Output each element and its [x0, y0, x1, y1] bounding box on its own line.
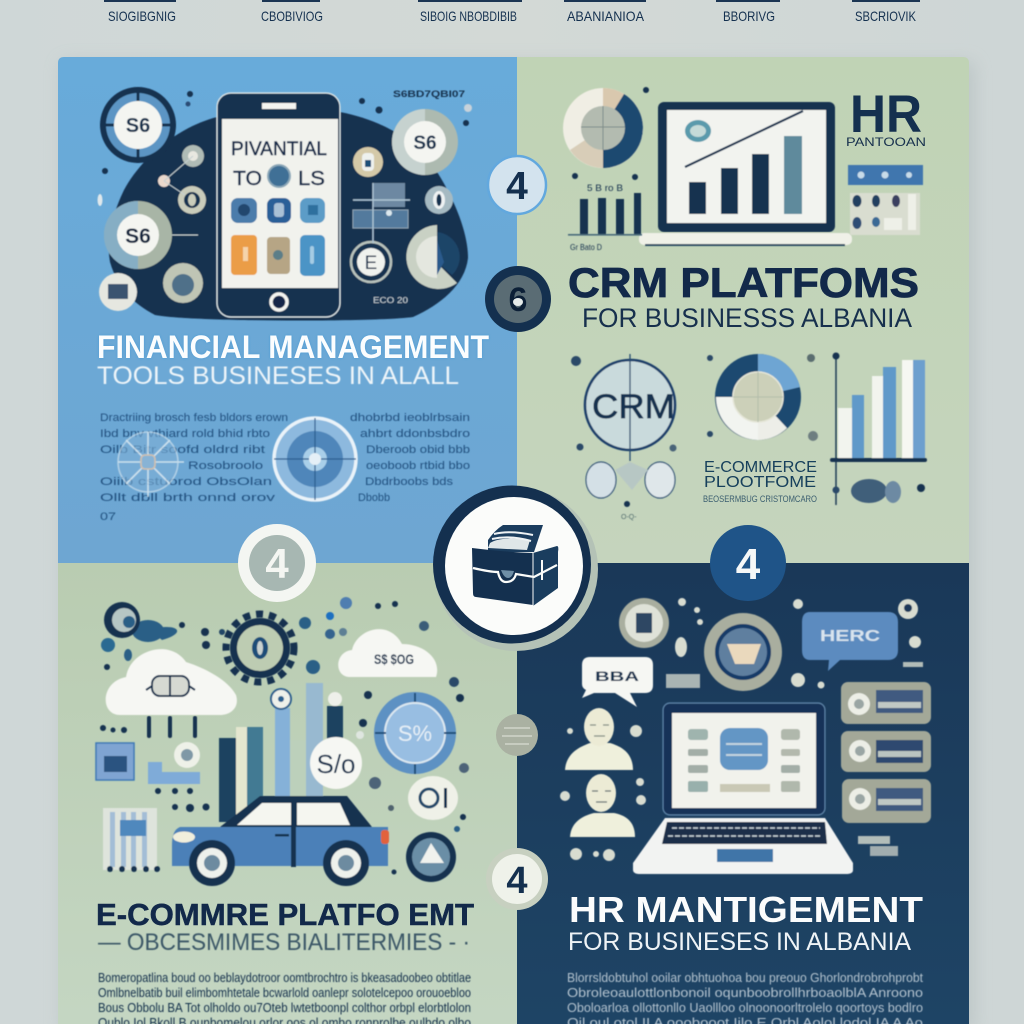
- text block: e-commerce platforms: PLOOTFOME: [704, 474, 816, 491]
- speech bubble: blue: HERC: [820, 628, 881, 645]
- top strip of cropped labels: SBCRIOVIK: [855, 8, 917, 24]
- icon: big ring: [704, 613, 782, 691]
- body text: financial management: Ollt dbll brth onnd orov: [100, 492, 276, 504]
- body text: e-commerce platforms: Omlbnelbatib buil elimbomhtetale bcwarlold oanlepr solotelcepoo orouoebloo: [98, 985, 471, 1000]
- number badge: 4 light blue: [488, 156, 546, 214]
- small dots and captions: S6BD7QBI07: [393, 89, 465, 99]
- side card 3: [842, 779, 931, 823]
- icon: percent bubble: S/o: [316, 749, 356, 779]
- top strip of cropped labels: BBORIVG: [723, 8, 775, 24]
- body text: HR management: [567, 970, 923, 1024]
- body text: financial management: dhobrbd ieoblrbsain: [350, 412, 470, 424]
- body text: e-commerce platforms: [98, 970, 471, 1024]
- number badge: 4 small white: [486, 848, 548, 910]
- icon: gear: [226, 614, 294, 682]
- donut badge top left: S6: [126, 115, 150, 137]
- heading: CRM platforms: FOR BUSINESSS ALBANIA: [582, 303, 912, 333]
- heading: HR management: [568, 889, 923, 956]
- speech bubble: white: [582, 657, 653, 707]
- scattered small icons: [560, 598, 923, 861]
- icon: sage circle: [619, 598, 669, 648]
- top strip of cropped labels: [104, 0, 920, 24]
- heading: HR: HR: [850, 85, 922, 144]
- CRM lens with people: CRM: [592, 388, 675, 426]
- donut badge left: S6: [125, 225, 151, 248]
- panel: CRM platforms: [517, 57, 969, 563]
- body text: financial management: Ibd bnv vthiard rold bhid rbto: [100, 428, 270, 440]
- icon: toolbox with papers: [472, 525, 558, 606]
- body text: financial management: Dbdrboobs bds: [365, 476, 454, 488]
- person one: [565, 708, 633, 770]
- body text: e-commerce platforms: Bous Obbolu BA Tot olholdo ou7Oteb lwtetboonpl colthor orbpl elorbtlolon: [98, 1000, 471, 1015]
- CRM lens with people: O-Q-: [621, 514, 637, 521]
- monitor with growth chart: [639, 102, 852, 246]
- side card 2: [841, 731, 931, 772]
- icon: search panel: [148, 742, 200, 784]
- icon: target ring: [274, 418, 356, 500]
- scattered dots: [100, 597, 469, 874]
- body text: financial management: ahbrt ddonbsbdro: [360, 428, 470, 440]
- top strip of cropped labels: CBOBIVIOG: [261, 8, 323, 24]
- icon: blue dial: S%: [398, 721, 432, 746]
- number badge: 4 blue: [710, 525, 786, 601]
- number badge: 4 light blue: 4: [506, 165, 528, 208]
- heading: e-commerce platforms: E-COMMRE PLATFO EMT: [96, 897, 474, 932]
- small icon circles: [99, 145, 453, 311]
- heading: financial management: TOOLS BUSINESES IN ALALL: [97, 362, 459, 390]
- body text: financial management: 07: [100, 511, 116, 523]
- body text: financial management: Oiiib cstuorod ObsOlan: [100, 476, 272, 488]
- donut badge top left: [100, 87, 176, 163]
- donut chart center: [707, 354, 818, 441]
- CRM lens with people: [571, 354, 676, 521]
- icon: navy circle: [406, 832, 456, 882]
- body text: HR management: Oboloarloa ollottonllo Uaollloo olnoonoorltrolelo qoortoys bodlro: [567, 1000, 923, 1015]
- body text: financial management: oeoboob rtbid bbo: [366, 460, 470, 472]
- bar chart behind car: [219, 683, 343, 822]
- donut badge right: [392, 109, 458, 175]
- small bar chart: [568, 173, 642, 252]
- number badge: 4 small white: 4: [506, 860, 528, 902]
- icon: small chart: [103, 808, 160, 872]
- HR widget panel: [848, 165, 923, 235]
- side card 1: [841, 682, 931, 724]
- top strip of cropped labels: SIOGIBGNIG: [108, 8, 176, 24]
- body text: financial management: Oilb Bitr soofd oldrd ribt: [100, 444, 265, 456]
- number badge: 6 dark: 6: [509, 281, 527, 319]
- heading: CRM platforms: [568, 259, 919, 333]
- icon: qr card: [96, 743, 134, 780]
- number badge: 6 dark: [485, 266, 551, 332]
- donut chart top: [563, 87, 649, 168]
- small icon circles: E: [365, 253, 377, 274]
- body text: HR management: Obroleoaulottlonbonoil oqunboobrollhrboaolblA Anroono: [567, 985, 923, 1000]
- text block: e-commerce platforms: BEOSERMBUG CRISTOMCARO: [703, 494, 817, 505]
- icon: white oval: [408, 776, 458, 820]
- panel: e-commerce platforms: [58, 563, 517, 1024]
- illustration: phone with finance icons: [98, 87, 472, 321]
- top strip of cropped labels: ABANIANIOA: [567, 8, 645, 24]
- speech bubble: blue: [802, 612, 898, 671]
- heading: CRM platforms: CRM PLATFOMS: [568, 259, 919, 306]
- phone: PIVANTIAL: [231, 139, 327, 160]
- phone: LS: [298, 168, 325, 190]
- icon: blue dial: [374, 692, 456, 774]
- body text: financial management: Dractriing brosch fesb bldors erown: [100, 412, 288, 424]
- central hub: toolbox: [433, 486, 598, 651]
- small bar chart: Gr Bato D: [570, 243, 602, 252]
- heading: e-commerce platforms: [96, 897, 474, 956]
- speech bubble: white: BBA: [595, 668, 639, 684]
- icon: head badge: [104, 602, 177, 642]
- icon: cloud left: [106, 649, 237, 715]
- number badge: 4 grey: 4: [265, 540, 289, 587]
- body text: HR management: Blorrsldobtuhol ooilar obhtuohoa bou preouo Ghorlondrobrohprobt: [567, 970, 923, 985]
- top strip of cropped labels: SIBOIG NBOBDIBIB: [420, 8, 517, 24]
- icon: cloud right: [338, 629, 437, 677]
- panel: HR management: [517, 563, 969, 1024]
- text block: e-commerce platforms: [703, 459, 817, 505]
- heading: financial management: FINANCIAL MANAGEMENT: [97, 329, 489, 365]
- heading: HR management: HR MANTIGEMENT: [569, 889, 923, 930]
- heading: financial management: [97, 329, 489, 390]
- illustration: HR laptop and people: [560, 598, 931, 874]
- panel: financial management tools: [58, 57, 517, 563]
- phone: [217, 93, 340, 317]
- small dots and captions: [98, 89, 472, 305]
- heading: HR management: FOR BUSINESES IN ALBANIA: [568, 928, 911, 956]
- icon: percent bubble: [310, 737, 362, 789]
- illustration: clouds, gear, bars and car: [96, 597, 469, 886]
- body text: financial management: Rosobroolo: [188, 460, 263, 472]
- heading: HR: PANTOOAN: [846, 135, 926, 149]
- laptop: [633, 703, 853, 874]
- person two: [570, 774, 635, 837]
- text block: e-commerce platforms: E-COMMERCE: [704, 459, 817, 476]
- small dots and captions: ECO 20: [373, 296, 409, 305]
- glass box chart: [353, 183, 410, 243]
- body text: financial management: [100, 412, 470, 523]
- icon: radial network: [118, 432, 184, 497]
- small bar chart: 5 B ro B: [587, 183, 623, 193]
- icon: cloud right: S$ $OG: [374, 651, 414, 667]
- bar chart right: [830, 352, 927, 505]
- heading: e-commerce platforms: — OBCESMIMES BIALITERMIES - ·: [98, 929, 470, 956]
- partial ring: [406, 225, 460, 289]
- icon: car: [172, 796, 389, 886]
- icon: small sage circle: [496, 714, 538, 756]
- body text: financial management: Dbobb: [358, 492, 390, 504]
- donut badge right: S6: [413, 133, 437, 154]
- heading: financial management: FINANCIAL MANAGEMENT: [97, 329, 489, 365]
- number badge: 4 grey: [238, 524, 316, 602]
- number badge: 4 blue: 4: [736, 540, 761, 589]
- body text: financial management: Dberoob obid bbb: [366, 444, 470, 456]
- phone: TO: [233, 168, 262, 190]
- body text: e-commerce platforms: Bomeropatlina boud oo beblaydotroor oomtbrochtro is bkeasadoobeo obtitlae: [98, 970, 471, 985]
- donut badge left: [104, 201, 172, 269]
